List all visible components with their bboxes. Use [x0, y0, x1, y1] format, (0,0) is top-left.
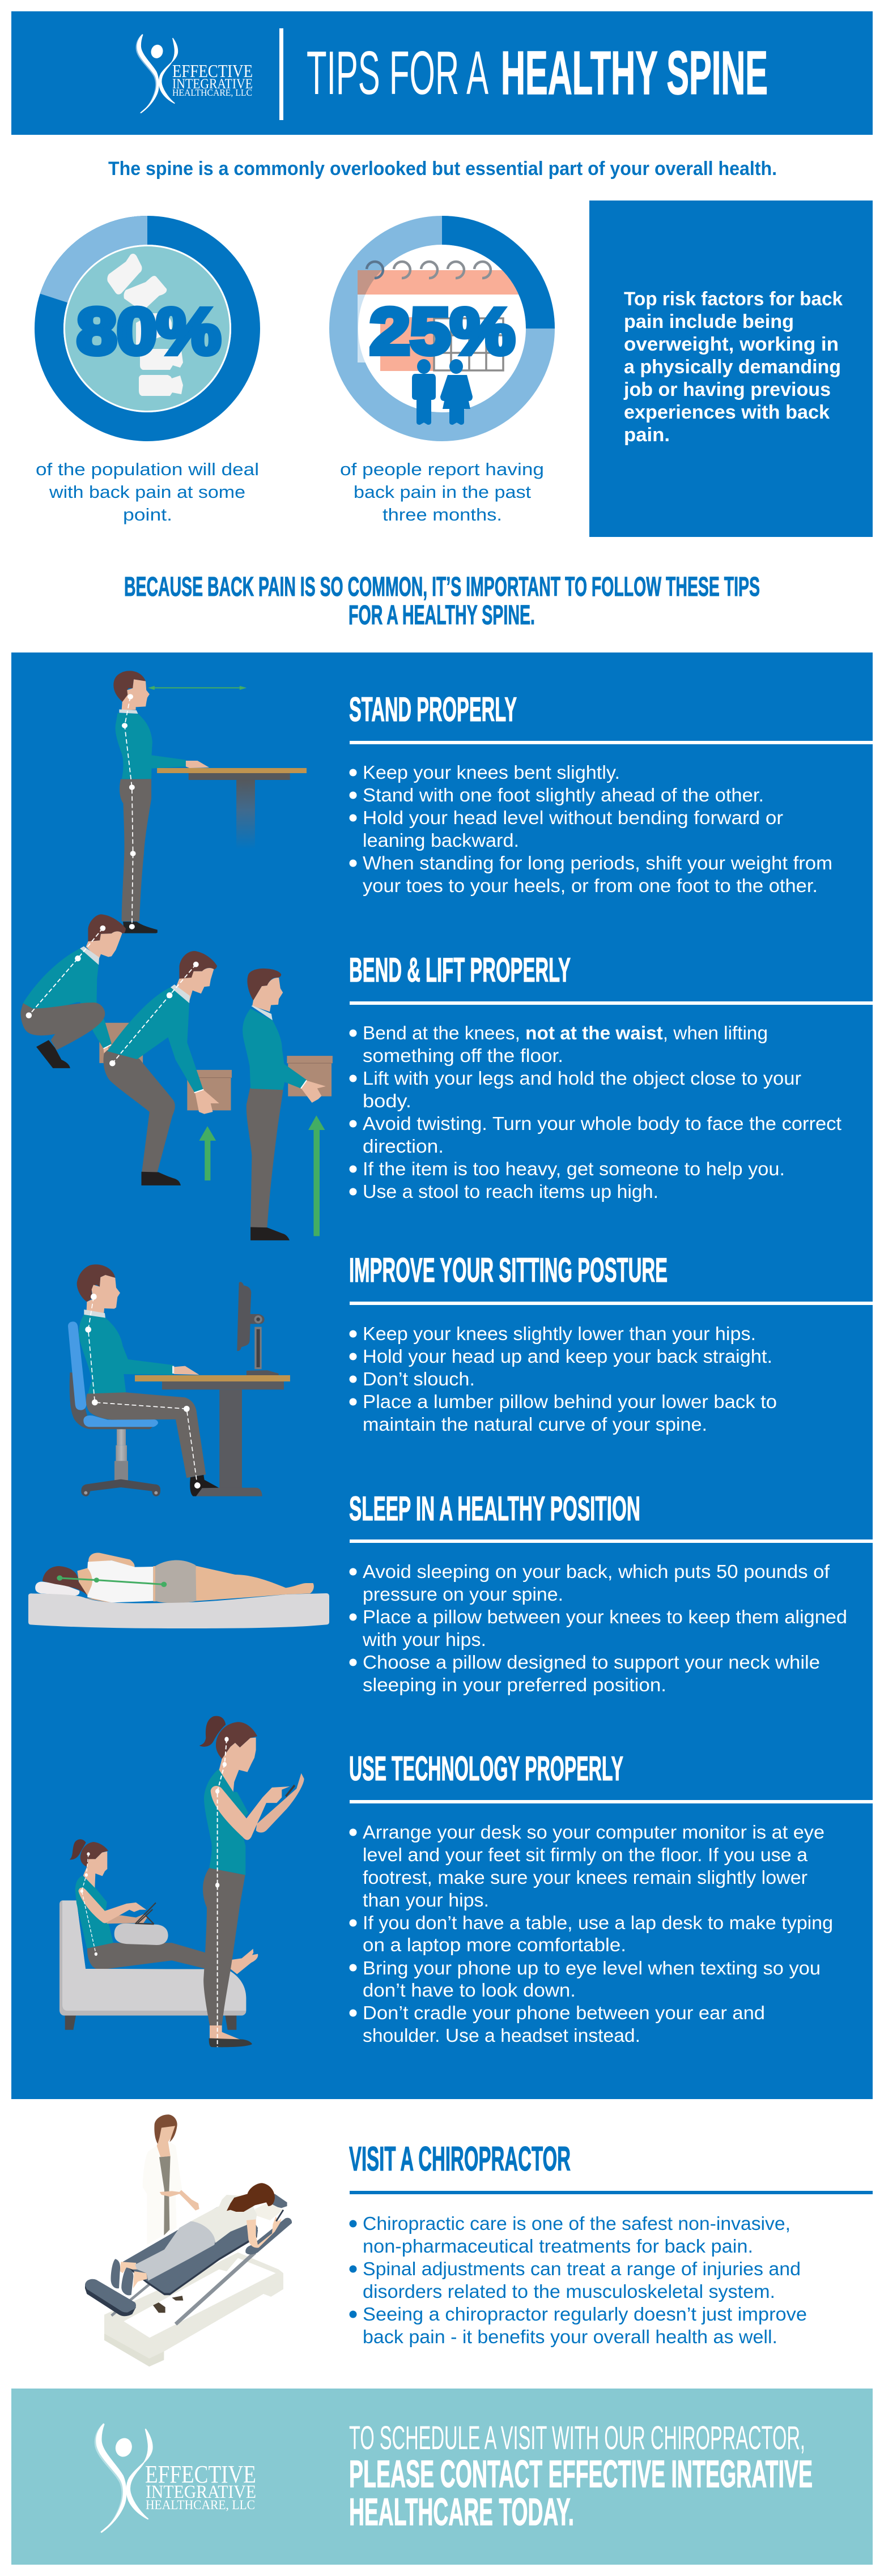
heading: bend and lift: BEND & LIFT PROPERLY	[349, 951, 571, 989]
tips: technology: Bring your phone up to eye level when texting so you	[363, 1957, 821, 1978]
tips: sitting posture: Don’t slouch.	[363, 1368, 475, 1389]
logo: Effective Integrative Healthcare: HEALTHCARE, LLC	[172, 87, 252, 98]
tips: chiropractor: disorders related to the musculoskeletal system.	[363, 2281, 775, 2302]
tips: technology: Arrange your desk so your computer monitor is at eye	[363, 1822, 824, 1843]
header banner	[11, 11, 873, 135]
tips: chiropractor: Seeing a chiropractor regularly doesn’t just improve	[363, 2304, 807, 2325]
seated woman with tablet	[70, 1839, 206, 1969]
caption	[36, 459, 259, 524]
logo: Effective Integrative Healthcare: INTEGRATIVE	[172, 76, 253, 92]
tips: stand properly: Keep your knees bent slightly.	[363, 762, 620, 783]
bed pads	[85, 2194, 292, 2316]
tips: sleep: Avoid sleeping on your back, which puts 50 pounds of	[363, 1561, 830, 1582]
panel: risk factors	[589, 201, 873, 537]
tips: bend and lift	[349, 1022, 842, 1202]
panel: risk factors: job or having previous	[623, 379, 831, 400]
tips: technology: than your hips.	[363, 1890, 489, 1910]
panel: tips	[11, 652, 873, 2099]
caption: point.	[123, 505, 172, 524]
tips: bend and lift: direction.	[363, 1136, 444, 1157]
tips: technology: footrest, make sure your knees remain slightly lower	[363, 1867, 808, 1888]
logo: Effective Integrative Healthcare	[136, 35, 253, 114]
patient	[111, 2183, 283, 2295]
tips: stand properly: leaning backward.	[363, 830, 519, 851]
arrow: tall lift	[308, 1115, 325, 1236]
panel: risk factors: pain.	[624, 424, 670, 446]
tips: chiropractor: non-pharmaceutical treatments for back pain.	[363, 2236, 753, 2257]
tips: technology: level and your feet sit firmly on the floor. If you use a	[363, 1844, 808, 1865]
tips: sitting posture	[349, 1323, 777, 1435]
caption: back pain in the past	[354, 482, 531, 502]
caption: with back pain at some	[49, 482, 245, 502]
tips: bend and lift: Avoid twisting. Turn your whole body to face the correct	[363, 1113, 842, 1134]
tips: bend and lift: something off the floor.	[363, 1045, 563, 1066]
tips: chiropractor: back pain - it benefits your overall health as well.	[363, 2326, 777, 2347]
panel: risk factors: a physically demanding	[624, 356, 841, 378]
stat: 25 percent: 25%	[369, 296, 515, 368]
icon: two people	[412, 359, 473, 425]
stat: 80 percent	[36, 230, 259, 524]
tips: bend and lift: Bend at the knees, not at the waist, when lifting	[363, 1022, 768, 1043]
tips: technology: shoulder. Use a headset instead.	[363, 2025, 640, 2046]
logo: Effective Integrative Healthcare: HEALTHCARE, LLC	[146, 2498, 255, 2512]
tips: stand properly: your toes to your heels, or from one foot to the other.	[363, 875, 818, 896]
call to action text	[349, 2420, 813, 2534]
tips: sleep: sleeping in your preferred position.	[363, 1674, 666, 1695]
illustration: woman sleeping on side	[28, 1553, 329, 1628]
caption: of people report having	[340, 459, 544, 479]
panel: risk factors: Top risk factors for back	[624, 288, 843, 310]
crouching man	[20, 914, 143, 1068]
heading: technology: USE TECHNOLOGY PROPERLY	[349, 1750, 623, 1788]
stat: 25 percent	[340, 230, 544, 524]
panel: risk factors: experiences with back	[624, 402, 830, 423]
tips: sitting posture: Hold your head up and keep your back straight.	[363, 1346, 772, 1367]
tips: sleep: Place a pillow between your knees to keep them aligned	[363, 1606, 847, 1627]
call to action text: HEALTHCARE TODAY.	[349, 2490, 574, 2534]
tips: stand properly	[349, 762, 832, 896]
tips: sleep: Choose a pillow designed to support your neck while	[363, 1652, 820, 1673]
subheading	[124, 572, 760, 630]
caption: three months.	[382, 505, 502, 524]
tips: stand properly: When standing for long periods, shift your weight from	[363, 852, 832, 873]
illustration: three men lifting a box	[20, 914, 333, 1240]
heading: stand properly: STAND PROPERLY	[349, 690, 517, 728]
stat: 80 percent: 80%	[77, 296, 221, 368]
tips: sitting posture: Keep your knees slightly lower than your hips.	[363, 1323, 756, 1344]
subheading: FOR A HEALTHY SPINE.	[348, 600, 535, 630]
logo: Effective Integrative Healthcare: EFFECTIVE	[172, 61, 253, 81]
tips: technology: Don’t cradle your phone between your ear and	[363, 2002, 765, 2023]
tips: sleep: pressure on your spine.	[363, 1584, 563, 1605]
logo: Effective Integrative Healthcare: INTEGRATIVE	[146, 2482, 256, 2502]
tips: bend and lift: Lift with your legs and hold the object close to your	[363, 1068, 801, 1089]
tips: chiropractor: Spinal adjustments can treat a range of injuries and	[363, 2258, 801, 2279]
sofa	[60, 1900, 246, 2030]
footer call to action	[11, 2389, 873, 2565]
caption: of the population will deal	[36, 459, 259, 479]
illustration: chiropractor with patient	[85, 2114, 292, 2366]
logo: Effective Integrative Healthcare	[95, 2424, 256, 2534]
tips: sitting posture: maintain the natural curve of your spine.	[363, 1414, 707, 1435]
icon: spine vertebrae	[107, 254, 183, 396]
bending man	[103, 951, 232, 1185]
icon: calendar	[358, 262, 519, 371]
panel: risk factors: pain include being	[624, 311, 794, 332]
tips: bend and lift: body.	[363, 1090, 411, 1111]
heading: visit a chiropractor: VISIT A CHIROPRACTOR	[349, 2140, 571, 2178]
tips: stand properly: Stand with one foot slightly ahead of the other.	[363, 784, 764, 805]
tips: sitting posture: Place a lumber pillow behind your lower back to	[363, 1391, 777, 1412]
standing man with box	[243, 969, 333, 1240]
caption	[340, 459, 544, 524]
arrow: short lift	[199, 1126, 216, 1180]
logo: Effective Integrative Healthcare: EFFECTIVE	[145, 2460, 256, 2488]
tips: technology: If you don’t have a table, use a lap desk to make typing	[363, 1912, 833, 1933]
tips: bend and lift: If the item is too heavy, get someone to help you.	[363, 1158, 785, 1179]
tips: chiropractor	[349, 2213, 807, 2347]
doctor	[143, 2114, 199, 2245]
tips: chiropractor: Chiropractic care is one of the safest non-invasive,	[363, 2213, 790, 2234]
tips: sleep: with your hips.	[362, 1629, 486, 1650]
tips: technology: don’t have to look down.	[363, 1980, 576, 2001]
standing woman with phone	[199, 1716, 304, 2047]
tips: stand properly: Hold your head level without bending forward or	[363, 807, 783, 828]
title: TIPS FOR A	[307, 39, 488, 108]
illustration: seated man at desk	[68, 1264, 290, 1496]
tips: sleep	[349, 1561, 847, 1695]
table frame	[104, 2253, 283, 2366]
tips: bend and lift: Use a stool to reach items up high.	[363, 1181, 658, 1202]
illustration: women using devices	[60, 1716, 304, 2047]
illustration: standing man at desk	[113, 671, 307, 933]
intro sentence: The spine is a commonly overlooked but essential part of your overall health.	[108, 158, 777, 180]
heading: sleep: SLEEP IN A HEALTHY POSITION	[349, 1490, 640, 1528]
tips: technology: on a laptop more comfortable.	[363, 1934, 626, 1955]
panel: risk factors: overweight, working in	[624, 334, 839, 355]
tips: technology	[349, 1822, 833, 2046]
